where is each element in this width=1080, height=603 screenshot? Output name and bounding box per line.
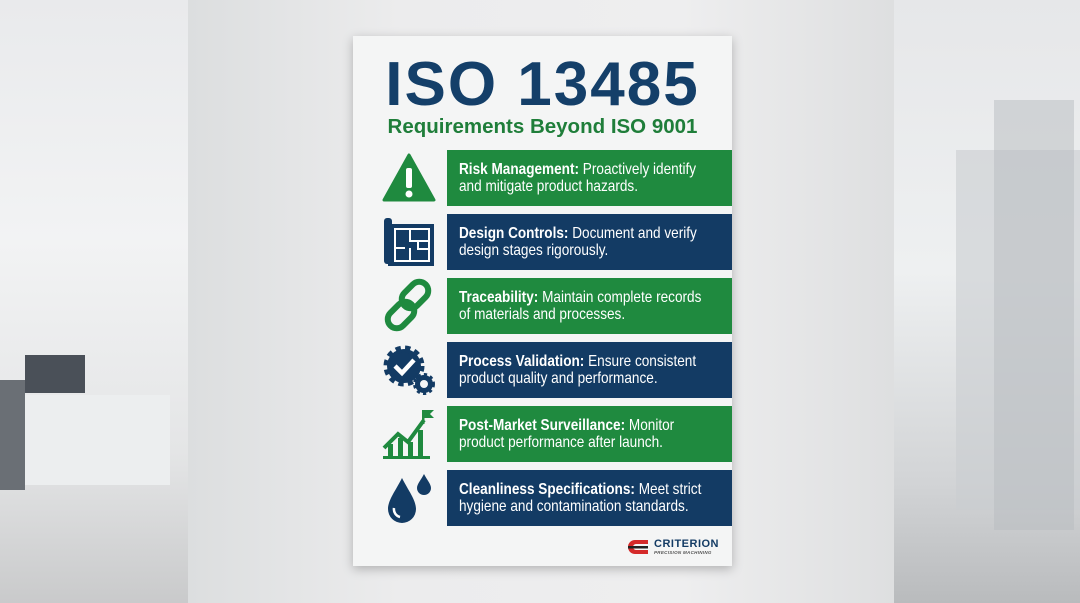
icon: blueprint [384,218,434,266]
bar: process validation [447,342,732,398]
bar: design controls: Design Controls: Document and verify [459,225,697,242]
bar: risk management: Risk Management: Proactively identify [459,161,696,178]
logo: criterion: PRECISION MACHINING [654,550,712,555]
bar: traceability: of materials and processes. [459,306,625,323]
bar: cleanliness specifications [447,470,732,526]
icon: warning [382,153,436,202]
title: ISO 13485 [385,50,700,119]
bar: design controls [447,214,732,270]
bar: cleanliness specifications: hygiene and contamination standards. [459,498,689,515]
bar: traceability: Traceability: Maintain complete records [459,289,701,306]
subtitle: Requirements Beyond ISO 9001 [388,115,697,138]
background: office right [894,0,1080,603]
bar: design controls: design stages rigorously. [459,242,608,259]
bar: post-market surveillance: product performance after launch. [459,434,663,451]
bar: process validation: product quality and performance. [459,370,658,387]
bar: traceability [447,278,732,334]
background: wall [188,0,894,603]
logo: criterion: CRITERION [654,538,719,550]
logo: criterion [628,538,719,555]
icon: gears with check [384,346,435,395]
bar: cleanliness specifications: Cleanliness Specifications: Meet strict [459,481,701,498]
bar: risk management [447,150,732,206]
icon: growth chart with flag [382,410,434,459]
bar: process validation: Process Validation: Ensure consistent [459,353,696,370]
bar: risk management: and mitigate product hazards. [459,178,638,195]
icon: chain link [384,278,432,332]
bar: post-market surveillance [447,406,732,462]
background: office left [0,0,188,603]
icon: water drops [388,474,431,523]
poster [353,36,732,566]
bar: post-market surveillance: Post-Market Surveillance: Monitor [459,417,674,434]
